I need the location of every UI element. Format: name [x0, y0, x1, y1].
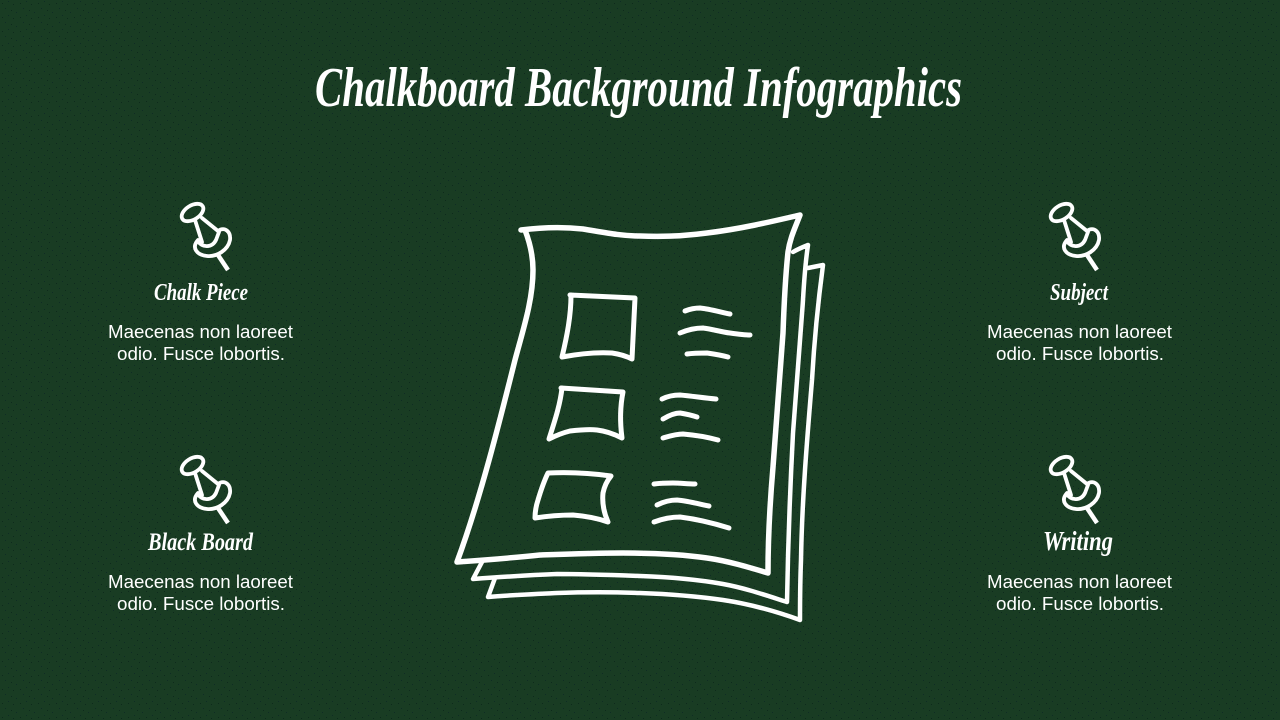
icon: push pin [179, 200, 230, 270]
image box 3 [535, 473, 611, 522]
text lines 1 [685, 308, 730, 314]
image box 1 [562, 295, 635, 359]
front sheet [457, 215, 800, 573]
description: Maecenas non laoreet [987, 571, 1173, 592]
item: Writing [987, 453, 1173, 614]
title: Chalkboard Background Infographics [315, 57, 962, 119]
heading: Subject: Subject [1050, 280, 1109, 306]
text lines 3 [654, 483, 695, 484]
description [987, 571, 1173, 614]
description: Maecenas non laoreet [987, 321, 1173, 342]
back sheet [488, 265, 823, 620]
description [108, 321, 294, 364]
icon: push pin [1048, 453, 1099, 523]
icon: push pin [179, 453, 230, 523]
description: odio. Fusce lobortis. [117, 593, 285, 614]
description: odio. Fusce lobortis. [996, 593, 1164, 614]
icon: push pin [1048, 200, 1099, 270]
description: Maecenas non laoreet [108, 571, 294, 592]
image box 2 [549, 388, 623, 439]
text lines 2 [662, 395, 716, 399]
item: Chalk Piece [108, 200, 294, 364]
description: Maecenas non laoreet [108, 321, 294, 342]
description: odio. Fusce lobortis. [996, 343, 1164, 364]
description: odio. Fusce lobortis. [117, 343, 285, 364]
heading: Writing: Writing [1043, 526, 1113, 556]
middle sheet [473, 245, 808, 602]
item: Black Board [108, 453, 294, 614]
heading: Chalk Piece: Chalk Piece [154, 280, 248, 306]
item: Subject [987, 200, 1173, 364]
description [987, 321, 1173, 364]
heading: Black Board: Black Board [147, 529, 253, 556]
illustration: stack of paper sheets [457, 215, 823, 620]
description [108, 571, 294, 614]
